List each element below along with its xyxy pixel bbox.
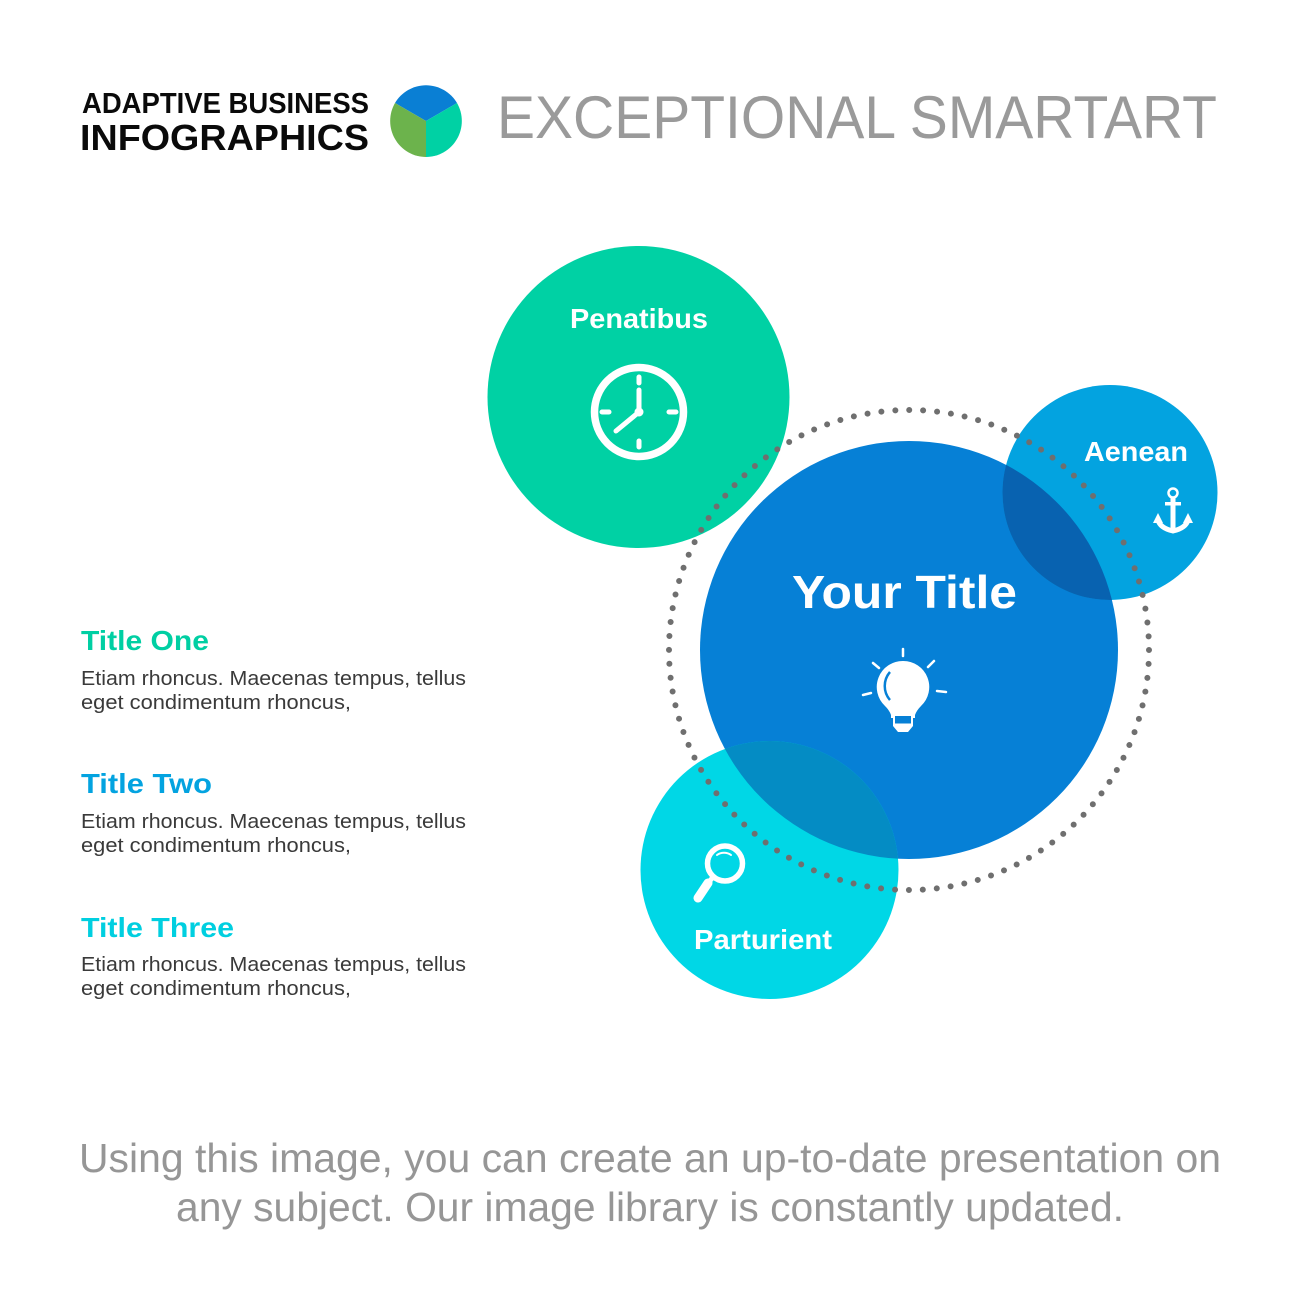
icon: magnifier (698, 846, 742, 898)
circle: aenean (1002, 385, 1218, 600)
footer text: Using this image, you can create an up-to-date presentation on (79, 1135, 1221, 1181)
body: title one: Etiam rhoncus. Maecenas tempus, tellus (81, 668, 466, 690)
label: your title: Your Title (792, 566, 1017, 618)
body: title three: Etiam rhoncus. Maecenas tempus, tellus (81, 954, 466, 976)
icon: anchor (1153, 488, 1193, 532)
body: title two (81, 811, 466, 857)
circle: penatibus (488, 246, 790, 548)
icon: light bulb (863, 649, 946, 732)
body: title one: eget condimentum rhoncus, (81, 692, 351, 714)
overlap: parturient and title (725, 741, 898, 859)
circle: your title (700, 441, 1118, 859)
main heading: EXCEPTIONAL SMARTART (497, 84, 1217, 151)
footer text: any subject. Our image library is constantly updated. (176, 1184, 1124, 1230)
label: aenean: Aenean (1084, 436, 1188, 467)
text block: title two (81, 768, 466, 857)
icon: logo pie (390, 85, 462, 157)
heading: title one: Title One (81, 625, 209, 656)
overlap: aenean and title (1002, 465, 1112, 600)
brand name: ADAPTIVE BUSINESS (82, 88, 369, 120)
body: title one (81, 668, 466, 714)
header (80, 84, 1217, 158)
dotted ring (669, 410, 1149, 890)
footer text (79, 1135, 1221, 1230)
label: penatibus: Penatibus (570, 303, 708, 334)
body: title two: Etiam rhoncus. Maecenas tempus, tellus (81, 811, 466, 833)
body: title three (81, 954, 466, 1000)
body: title three: eget condimentum rhoncus, (81, 978, 351, 1000)
brand name: INFOGRAPHICS (80, 117, 369, 158)
icon: clock (594, 368, 684, 456)
heading: title three: Title Three (81, 912, 234, 943)
text block: title three (81, 912, 466, 1000)
circle: parturient (640, 741, 898, 999)
body: title two: eget condimentum rhoncus, (81, 835, 351, 857)
heading: title two: Title Two (81, 768, 212, 799)
diagram: overlapping circles (488, 246, 1218, 999)
label: parturient: Parturient (694, 924, 832, 955)
brand name (80, 88, 369, 158)
text block: title one (81, 625, 466, 714)
